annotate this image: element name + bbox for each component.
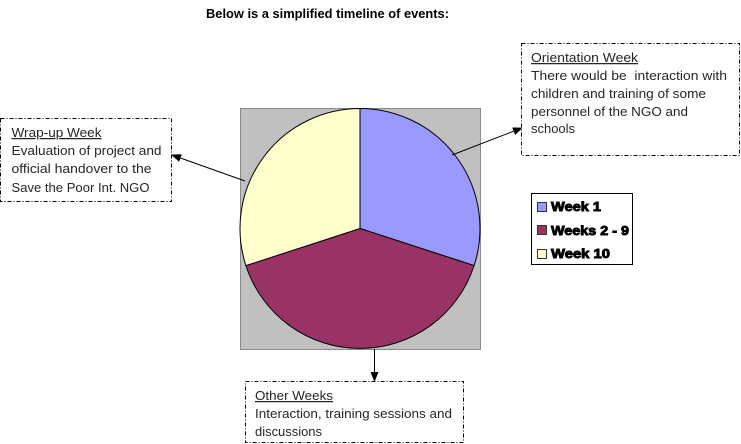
legend item: weeks 2-9: Weeks 2 - 9 [551, 223, 629, 238]
callout: orientation week: schools [531, 122, 575, 136]
callout: orientation week [522, 44, 740, 156]
callout: wrap-up week: Save the Poor Int. NGO [12, 181, 150, 195]
callout: orientation week: children and training of some [531, 87, 706, 101]
arrow: to wrap-up week [172, 155, 245, 181]
slice: week 1 [360, 108, 480, 266]
callout: wrap-up week: Wrap-up Week [12, 126, 102, 140]
title: Below is a simplified timeline of events: [206, 7, 449, 21]
callout: other weeks: Interaction, training sessions and [255, 407, 452, 421]
legend [532, 194, 632, 264]
arrow: to orientation week [452, 128, 522, 155]
slice: week 10 [240, 108, 360, 266]
callout: orientation week: personnel of the NGO and [531, 105, 688, 119]
callout: orientation week: Orientation Week [531, 51, 639, 65]
callout: other weeks: Other Weeks [255, 389, 333, 403]
callout: other weeks [246, 382, 464, 442]
callout: wrap-up week: Evaluation of project and [12, 144, 162, 158]
legend item: week 10: Week 10 [551, 246, 610, 261]
pie chart [240, 108, 480, 350]
legend item: week 1: Week 1 [551, 199, 601, 214]
callout: orientation week: There would be interaction with [531, 69, 727, 83]
callout: other weeks: discussions [255, 425, 322, 439]
arrow: to other weeks [374, 349, 376, 381]
callout: wrap-up week: official handover to the [12, 162, 152, 176]
callout: wrap-up week [0, 118, 172, 202]
slice: weeks 2-9 [246, 228, 474, 348]
